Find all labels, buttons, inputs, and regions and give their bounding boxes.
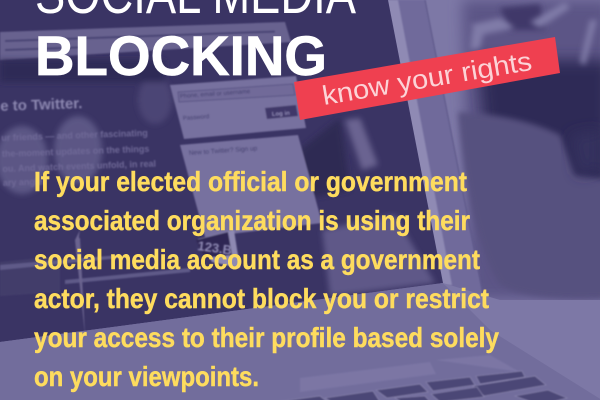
body statement: social media account as a government [34,244,480,275]
body statement: associated organization is using their [34,205,470,236]
cookie banner [0,22,291,60]
laptop screen [0,0,443,342]
background photo: laptop on a desk: Log in [272,111,290,118]
screen text [0,93,157,188]
screen text: ur friends — and other fascinating [1,128,148,143]
keyboard keys [275,371,567,400]
red tag: know your rights [294,37,560,120]
sign-up card [180,135,322,237]
screen text: e to Twitter. [0,95,83,115]
screen text: ou. And watch events unfold, in real [2,159,156,174]
body statement: If your elected official or government [34,166,467,197]
red tag: know your rights: know your rights [320,46,534,111]
title [35,0,357,87]
photo of people [0,60,435,296]
screen text: the-moment updates on the things [2,144,149,159]
background photo: laptop on a desk: Phone, email or username [180,89,251,100]
laptop deck [0,283,600,400]
body statement: your access to their profile based solely [34,322,500,353]
blurred plant and pot [458,0,600,300]
body statement [34,166,500,392]
body statement: on your viewpoints. [34,361,259,392]
title line: BLOCKING: BLOCKING [35,24,327,87]
laptop bezel [385,0,492,345]
background photo: laptop on a desk: 123.B [197,238,233,258]
body statement: actor, they cannot block you or restrict [34,283,489,314]
laptop screen content [0,22,435,335]
background photo: laptop on a desk: Password [183,114,209,122]
background photo: laptop on a desk: New to Twitter? Sign up [189,145,258,157]
left photo captions [196,232,232,258]
log in button [265,105,298,119]
login card [170,76,306,139]
screen text: ary angle. [3,176,45,188]
